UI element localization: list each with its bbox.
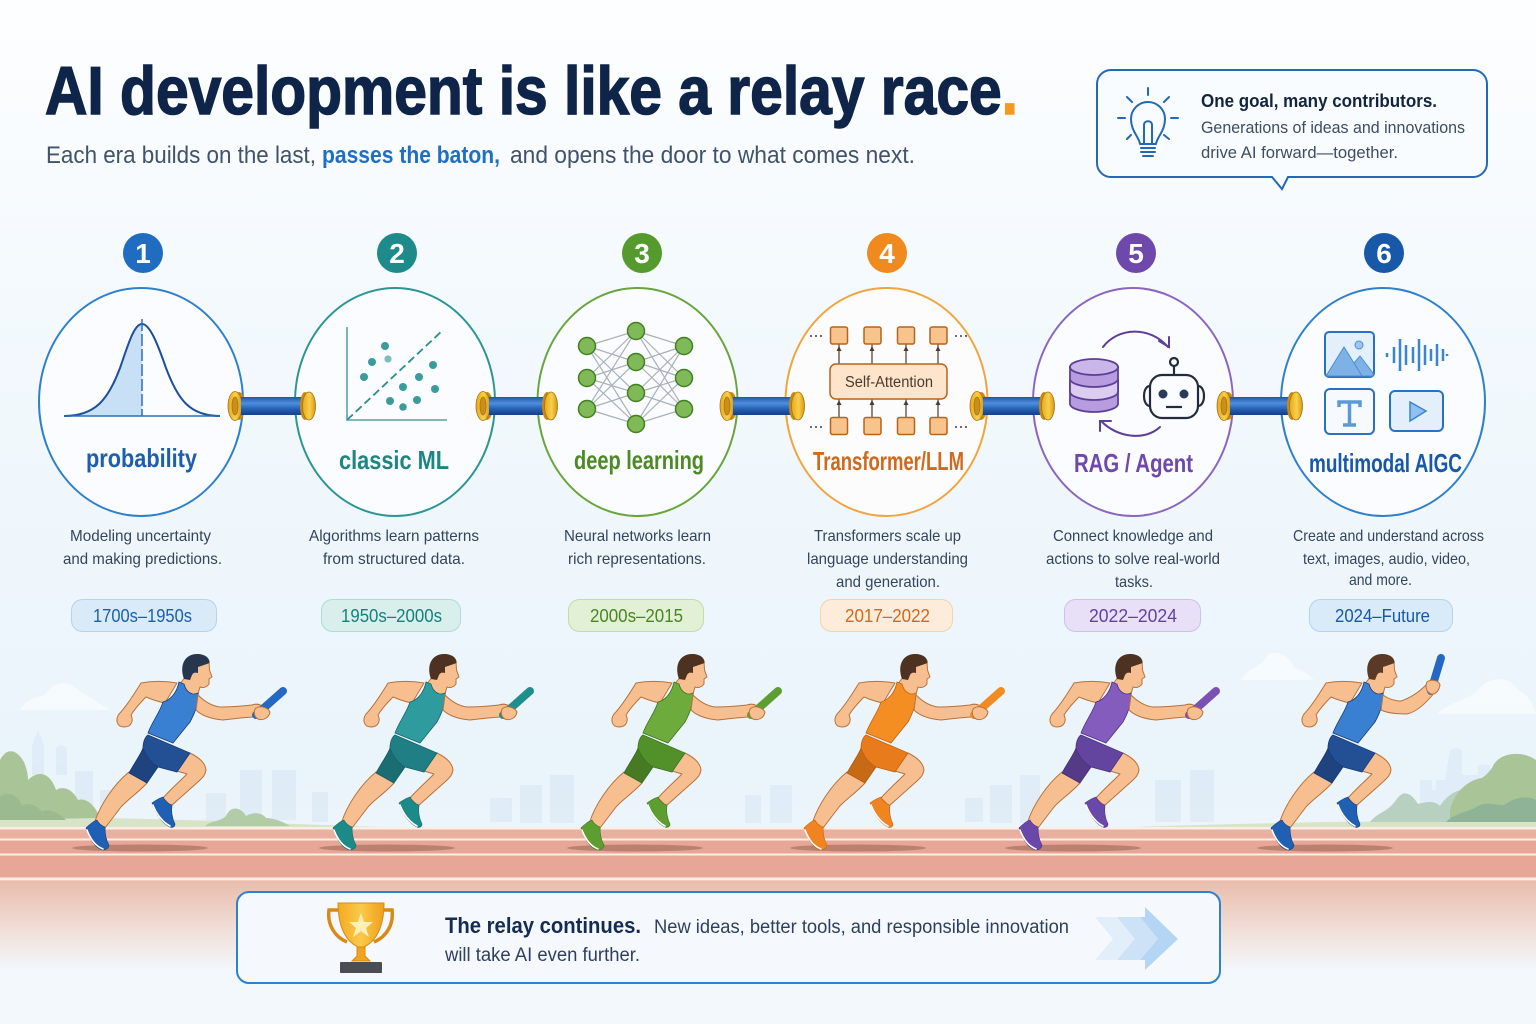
era 6: multimodal AIGC [1281,233,1485,632]
icon: neural network [578,322,692,432]
era 2: classic ML: 1950s–2000s [341,606,442,626]
running track [0,827,1536,971]
era 4: Transformer/LLM: language understanding [807,551,968,568]
era 6: multimodal AIGC: Create and understand across [1293,528,1484,545]
era 1: probability: Modeling uncertainty [70,528,211,545]
era 5: RAG / Agent: 2022–2024 [1089,606,1177,626]
runner 4 [790,654,1001,852]
baton connector 4 [970,392,1054,420]
icon: self-attention block: Self-Attention [845,374,933,391]
era 6: multimodal AIGC: 2024–Future [1335,606,1430,626]
era 1: probability: probability [86,443,197,473]
subtitle: Each era builds on the last, [46,142,316,169]
era 6: multimodal AIGC: 6 [1376,238,1392,269]
era 2: classic ML: from structured data. [323,551,465,568]
era 2: classic ML: classic ML [339,445,449,475]
era 5: RAG / Agent: Connect knowledge and [1053,528,1213,545]
subtitle: and opens the door to what comes next. [510,142,915,169]
era 5: RAG / Agent: 5 [1128,238,1144,269]
era 5: RAG / Agent [1033,233,1233,632]
era 5: RAG / Agent: tasks. [1115,574,1153,591]
era 3: deep learning: 2000s–2015 [590,606,683,626]
era 6: multimodal AIGC: text, images, audio, video, [1303,551,1470,568]
era 3: deep learning: Neural networks learn [564,528,711,545]
callout: one goal: Generations of ideas and innovations [1201,119,1465,137]
callout: one goal: One goal, many contributors. [1201,91,1437,111]
title: AI development is like a relay race. [45,53,1018,129]
era 1: probability [39,233,243,632]
callout: one goal: drive AI forward—together. [1201,144,1398,162]
scenery: skyline, clouds and bushes [0,653,1536,830]
runner 2 [319,654,530,852]
era 4: Transformer/LLM: 4 [879,238,895,269]
era 1: probability: 1 [135,238,151,269]
arrow: cycle between knowledge and agent [1100,332,1169,436]
icon: scatter plot [347,327,447,420]
runner 1 [72,654,283,852]
era 3: deep learning: 3 [634,238,650,269]
era 2: classic ML: Algorithms learn patterns [309,528,479,545]
icon: light bulb [1118,88,1178,156]
era 3: deep learning [538,233,738,632]
subtitle: passes the baton, [322,142,500,169]
runner 6 [1257,654,1441,852]
era 4: Transformer/LLM [786,233,988,632]
icon: trophy [329,903,392,973]
runner 3 [567,654,778,852]
baton connector 2 [476,392,558,420]
runner 5 [1005,654,1216,852]
icon: database [1070,359,1118,412]
era 4: Transformer/LLM: 2017–2022 [845,606,930,626]
icon: bell curve [64,319,220,416]
era 3: deep learning: deep learning [574,445,704,475]
era 5: RAG / Agent: actions to solve real-world [1046,551,1220,568]
baton connector 5 [1217,392,1302,420]
era 3: deep learning: rich representations. [568,551,706,568]
grass strip [0,818,1536,830]
era 6: multimodal AIGC: multimodal AIGC [1309,448,1462,478]
banner: the relay continues: New ideas, better tools, and responsible innovation [654,917,1069,938]
era 2: classic ML [295,233,495,632]
icon: media types [1325,332,1447,434]
icon: robot [1144,358,1204,418]
subtitle [46,142,915,169]
era 1: probability: and making predictions. [63,551,222,568]
era 1: probability: 1700s–1950s [93,606,192,626]
callout: one goal [1097,70,1487,189]
icon: self-attention block [810,327,967,434]
era 5: RAG / Agent: RAG / Agent [1074,448,1193,478]
era 2: classic ML: 2 [389,238,405,269]
arrow: forward chevrons [1095,907,1178,970]
era 4: Transformer/LLM: Transformers scale up [814,528,961,545]
banner: the relay continues: The relay continues. [445,913,641,938]
era 4: Transformer/LLM: and generation. [836,574,940,591]
era 4: Transformer/LLM: Transformer/LLM [813,446,964,476]
banner: the relay continues [237,892,1220,983]
banner: the relay continues: will take AI even further. [444,945,640,966]
era 6: multimodal AIGC: and more. [1349,572,1412,589]
baton connector 1 [228,392,316,420]
baton connector 3 [720,392,804,420]
